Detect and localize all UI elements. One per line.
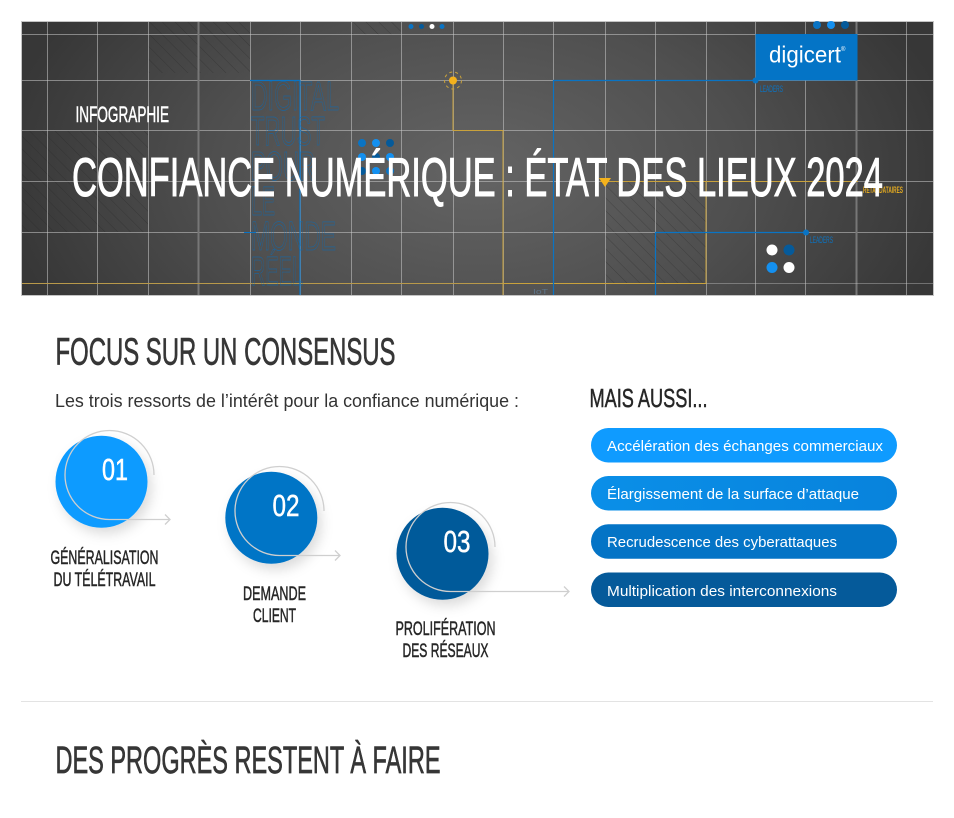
step 01: GÉNÉRALISATION xyxy=(50,548,158,569)
outlined background words: LE xyxy=(251,178,275,224)
outlined background words xyxy=(251,73,339,294)
dots: bottom right xyxy=(766,244,794,273)
heading: mais aussi: MAIS AUSSI... xyxy=(590,383,708,413)
outlined background words: RÉEL xyxy=(251,248,303,294)
step 02 xyxy=(225,467,340,627)
pill: élargissement xyxy=(591,476,897,510)
pill: recrudescence xyxy=(591,524,897,559)
dots: top centre xyxy=(408,24,444,29)
icon: warning triangle xyxy=(599,178,611,187)
logo: digicert: digicert xyxy=(769,42,842,68)
intro text: Les trois ressorts de l’intérêt pour la confiance numérique : xyxy=(55,391,519,411)
step 03: 03 xyxy=(444,524,470,559)
dots: centre grid xyxy=(358,139,394,175)
pill: recrudescence: Recrudescence des cyberattaques xyxy=(607,534,837,551)
step 03 xyxy=(396,503,569,662)
pill: élargissement: Élargissement de la surface d’attaque xyxy=(607,486,859,503)
label: leaders lower: LEADERS xyxy=(810,235,833,245)
label: leaders lower xyxy=(803,230,833,245)
pill: multiplication xyxy=(591,572,897,607)
icon: gold node xyxy=(444,72,462,89)
pill: accélération xyxy=(591,428,897,462)
step 01: DU TÉLÉTRAVAIL xyxy=(54,570,156,591)
heading: progrès: DES PROGRÈS RESTENT À FAIRE xyxy=(56,739,440,782)
step 02: DEMANDE xyxy=(243,584,306,605)
banner kicker: INFOGRAPHIE xyxy=(76,102,169,127)
pill: accélération: Accélération des échanges commerciaux xyxy=(607,438,883,455)
outlined background words: TRUST xyxy=(251,108,325,154)
heading: focus: FOCUS SUR UN CONSENSUS xyxy=(56,332,396,374)
label: retardataires: RETARDATAIRES xyxy=(863,185,903,195)
step 01: 01 xyxy=(102,452,128,487)
step 03: PROLIFÉRATION xyxy=(396,619,496,640)
label: leaders: LEADERS xyxy=(760,84,783,94)
logo: digicert xyxy=(756,34,858,80)
logo: digicert: ® xyxy=(841,46,846,53)
outlined background words: POUR xyxy=(251,143,315,189)
pill: multiplication: Multiplication des interconnexions xyxy=(607,583,837,600)
step 02: CLIENT xyxy=(253,606,296,627)
label: leaders xyxy=(752,78,783,94)
step 02: 02 xyxy=(272,488,300,523)
outlined background words: MONDE xyxy=(251,213,336,259)
step 03: DES RÉSEAUX xyxy=(402,641,489,662)
label: iot: IoT xyxy=(533,289,549,296)
step 01 xyxy=(50,430,170,591)
header banner xyxy=(22,21,934,296)
dots: top right xyxy=(813,21,849,29)
outlined background words: DIGITAL xyxy=(251,73,339,119)
